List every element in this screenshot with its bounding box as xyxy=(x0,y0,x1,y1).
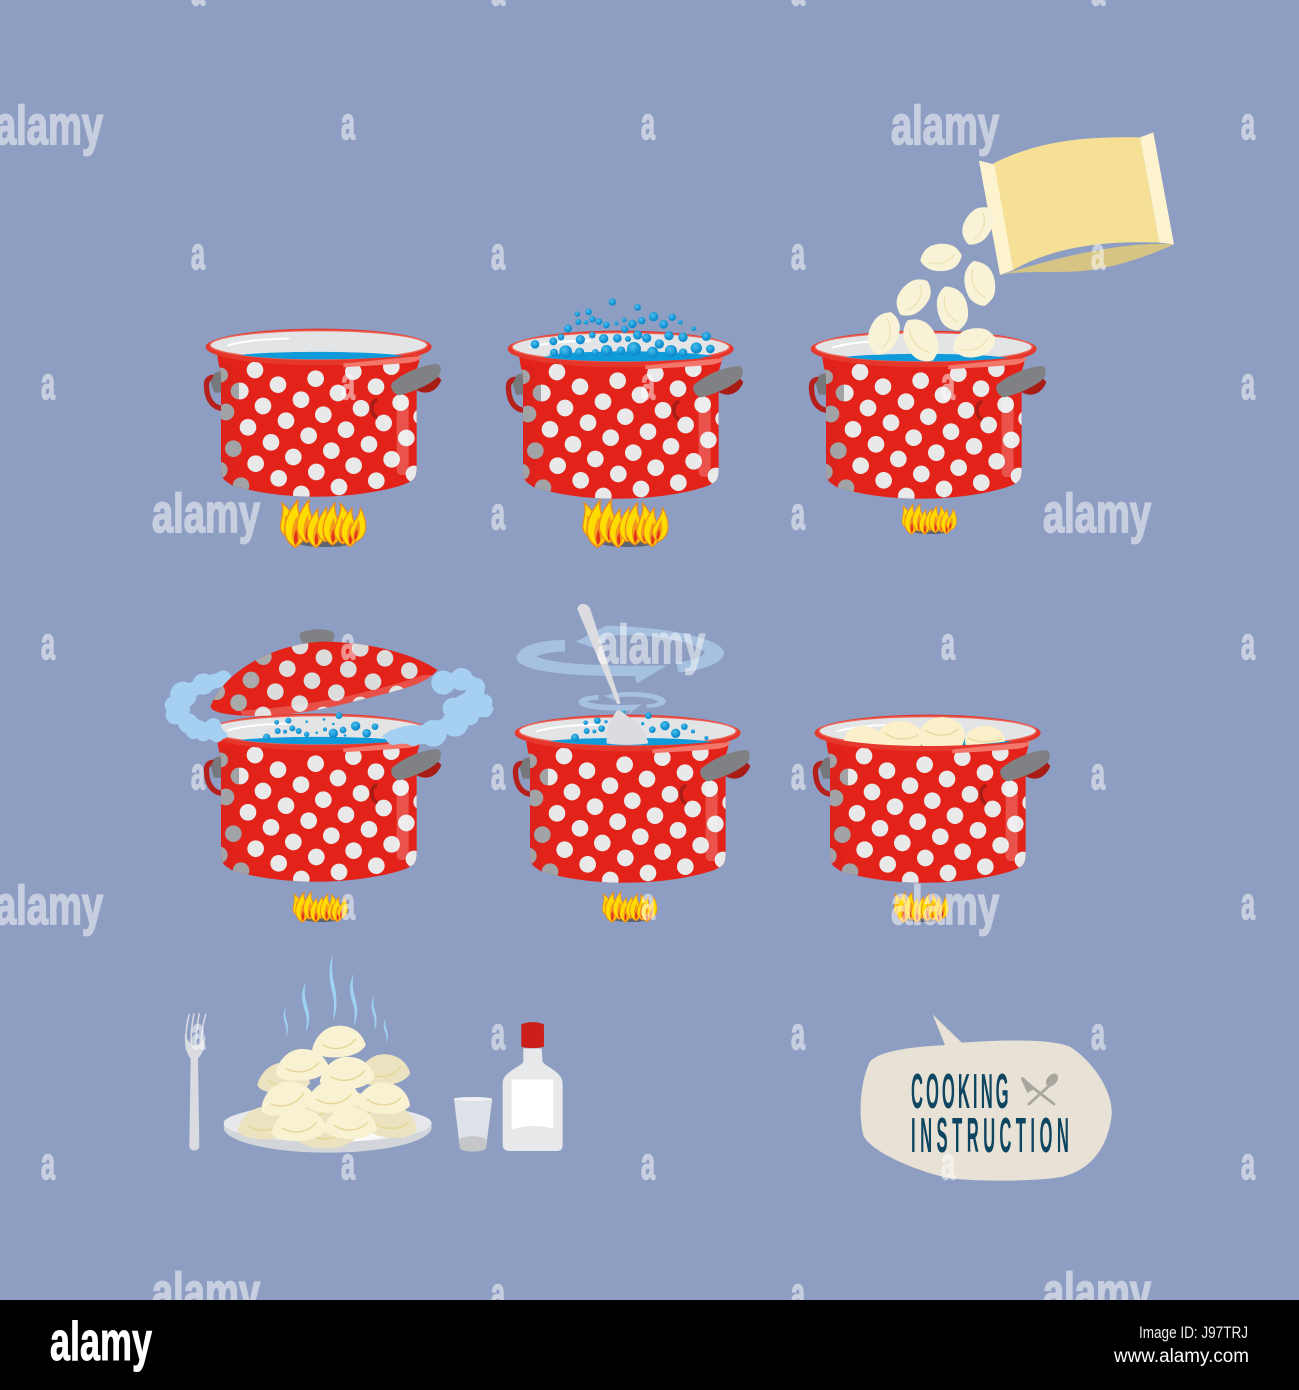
watermark: a xyxy=(1091,228,1106,279)
watermark: alamy xyxy=(597,613,705,675)
watermark: a xyxy=(1241,878,1256,929)
watermark: a xyxy=(791,228,806,279)
pot lid xyxy=(208,629,437,723)
bubbles in pot 4 xyxy=(263,712,378,741)
speech bubble: cooking instruction xyxy=(861,1014,1112,1181)
burner flame 2 xyxy=(579,499,672,547)
boiling bubbles xyxy=(531,298,715,360)
icon: fork xyxy=(185,1013,206,1150)
text: cooking: COOKING xyxy=(911,1064,1009,1119)
watermark: a xyxy=(641,358,656,409)
watermark: a xyxy=(491,748,506,799)
watermark: a xyxy=(941,358,956,409)
burner flame 5 xyxy=(600,892,660,922)
watermark: a xyxy=(491,1008,506,1059)
steam wisps over plate xyxy=(284,953,388,1042)
steam in front of rim xyxy=(202,725,435,745)
burner flame 1 xyxy=(276,499,370,547)
burner flame 6 xyxy=(891,892,951,922)
icon: vodka bottle xyxy=(503,1022,563,1151)
watermark: a xyxy=(791,1268,806,1319)
watermark: a xyxy=(641,98,656,149)
watermark: a xyxy=(791,748,806,799)
watermark: a xyxy=(791,488,806,539)
footer logo: alamy xyxy=(50,1310,152,1372)
text: instruction: INSTRUCTION xyxy=(911,1108,1069,1163)
pot 2: boiling water xyxy=(508,331,743,504)
image id: Image ID: J97TRJ xyxy=(1139,1323,1248,1342)
stirring arrows xyxy=(517,626,724,714)
watermark: alamy xyxy=(1043,482,1151,544)
pot 5: stirring xyxy=(515,715,750,888)
watermark: a xyxy=(1241,98,1256,149)
watermark: a xyxy=(491,228,506,279)
watermark: a xyxy=(191,748,206,799)
watermark: a xyxy=(791,1008,806,1059)
watermark: a xyxy=(1241,358,1256,409)
dumplings floating in pot 6 xyxy=(844,717,1005,746)
pot 3: adding dumplings xyxy=(811,331,1046,504)
watermark: alamy xyxy=(1043,1261,1151,1323)
watermark: a xyxy=(1241,1138,1256,1189)
watermark: a xyxy=(341,618,356,669)
watermark: alamy xyxy=(152,482,260,544)
watermark: alamy xyxy=(891,874,999,936)
watermark: alamy xyxy=(891,94,999,156)
pot 1: water on the burner xyxy=(206,329,441,502)
watermark: a xyxy=(41,618,56,669)
icon: dumpling bag xyxy=(979,132,1174,275)
watermark: a xyxy=(341,878,356,929)
watermark: a xyxy=(1091,748,1106,799)
icon: shot glass xyxy=(454,1097,492,1151)
watermark: a xyxy=(41,1138,56,1189)
spoon xyxy=(577,604,648,745)
watermark: a xyxy=(341,1138,356,1189)
bubbles in pot 5 xyxy=(571,710,708,742)
falling dumplings xyxy=(862,201,1000,368)
footer band xyxy=(0,1300,1299,1390)
website: www.alamy.com xyxy=(1113,1346,1249,1367)
watermark: a xyxy=(191,1008,206,1059)
steam ring xyxy=(165,668,492,747)
pot 4: covered with lid, boiling over xyxy=(206,714,441,887)
watermark: a xyxy=(641,1138,656,1189)
watermark: alamy xyxy=(152,1261,260,1323)
burner flame 4 xyxy=(290,892,350,922)
watermark: a xyxy=(641,878,656,929)
bubble shape xyxy=(861,1014,1112,1181)
watermark: a xyxy=(341,358,356,409)
plate of dumplings xyxy=(224,1024,432,1153)
watermark: a xyxy=(1241,618,1256,669)
icon: crossed fork and spoon xyxy=(1022,1073,1059,1104)
watermark: a xyxy=(491,488,506,539)
watermark: a xyxy=(491,1268,506,1319)
watermark: a xyxy=(191,228,206,279)
watermark: a xyxy=(941,618,956,669)
watermark: a xyxy=(941,1138,956,1189)
watermark: a xyxy=(341,98,356,149)
watermark: a xyxy=(41,358,56,409)
watermark: a xyxy=(1091,1008,1106,1059)
burner flame 3 xyxy=(899,504,959,534)
pot 6: dumplings cooked xyxy=(815,715,1050,888)
